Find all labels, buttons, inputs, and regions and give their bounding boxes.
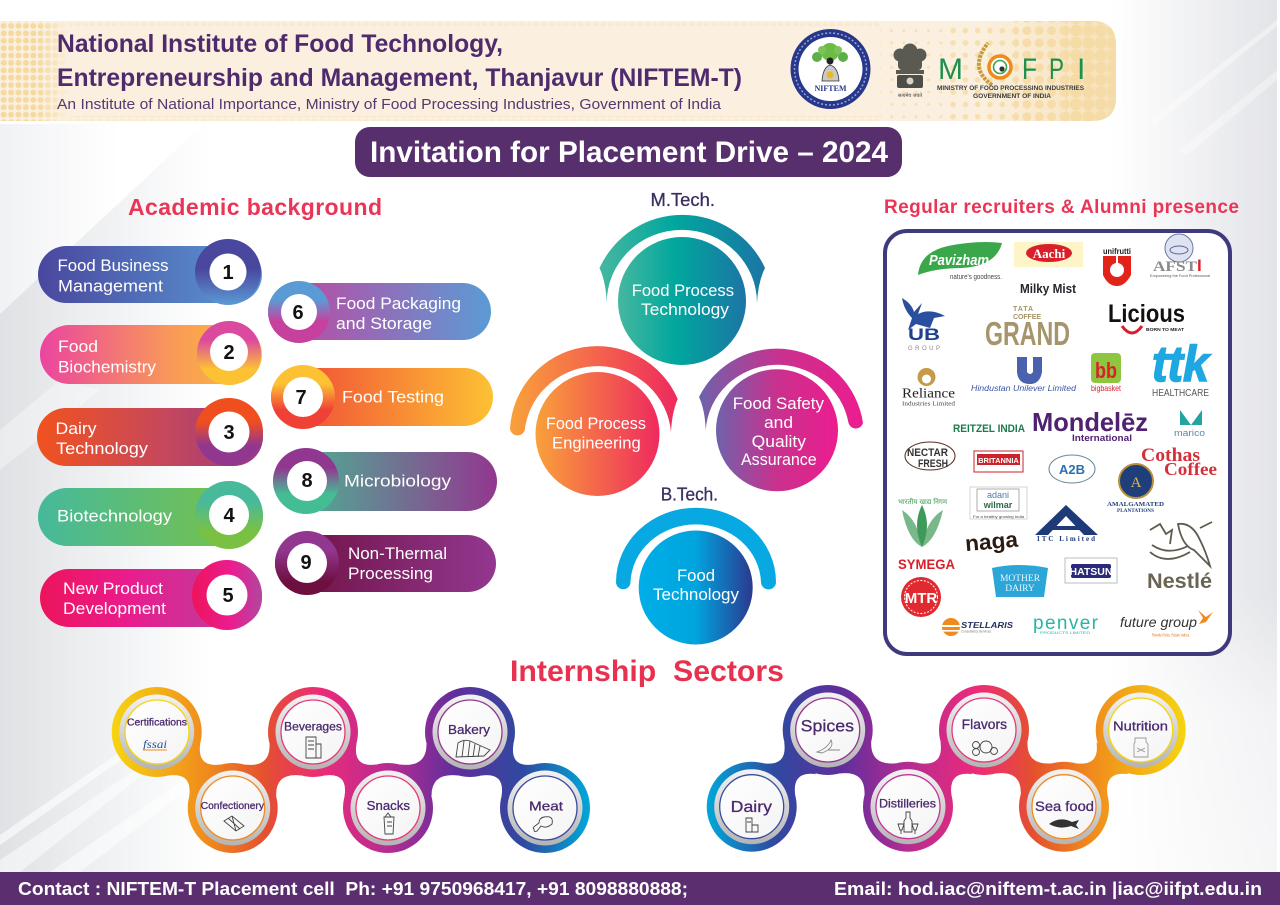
logo: Cothas Coffee: Cothas xyxy=(1141,445,1200,466)
logo: Food Corporation of India xyxy=(898,497,948,547)
panel: degree programmes xyxy=(510,190,863,644)
logo: unifrutti: unifrutti xyxy=(1103,247,1131,256)
heading: regular recruiters: Regular recruiters & Alumni presence xyxy=(884,197,1239,218)
item 6 xyxy=(268,281,491,343)
item 7 xyxy=(271,365,493,429)
chain: internship sectors left xyxy=(112,687,590,853)
sector: Flavors xyxy=(946,692,1022,768)
logo: A2B xyxy=(1049,455,1095,483)
logo: Hatsun xyxy=(1065,558,1117,583)
logo: Nectar Fresh: FRESH xyxy=(918,458,948,470)
logo: Britannia: BRITANNIA xyxy=(978,456,1019,465)
sector: Snacks: Snacks xyxy=(367,798,410,813)
sector: Flavors: Flavors xyxy=(962,717,1007,732)
sector: Confectionery: Confectionery xyxy=(201,800,265,812)
logo: Future Group xyxy=(1120,610,1213,638)
item 6: 6 xyxy=(292,302,304,324)
item 7: 7 xyxy=(295,387,307,409)
chain: internship sectors right xyxy=(707,685,1186,852)
item 1 xyxy=(38,239,262,305)
item 9: Processing xyxy=(348,564,433,583)
logo: bigbasket xyxy=(1091,353,1122,393)
header title text: Entrepreneurship and Management, Thanjavur (NIFTEM-T) xyxy=(57,64,742,92)
label: B.Tech: B.Tech. xyxy=(661,485,718,505)
header title text: An Institute of National Importance, Ministry of Food Processing Industries, Government of India xyxy=(57,96,722,113)
logo: Symega: SYMEGA xyxy=(898,556,955,572)
item 5: New Product xyxy=(63,579,163,598)
footer contact bar: Contact : NIFTEM-T Placement cell Ph: +91 9750968417, +91 8098880888; xyxy=(18,879,688,899)
logo: Nestle xyxy=(1147,522,1212,593)
logo: Adani Wilmar xyxy=(970,487,1027,519)
logo: TTK Healthcare: ttk xyxy=(1152,336,1211,392)
item 1: Management xyxy=(58,276,163,296)
logo: Tata Coffee Grand xyxy=(985,306,1070,352)
logo: Nestle: Nestlé xyxy=(1147,570,1212,593)
item 5: 5 xyxy=(222,585,234,607)
sector: Nutrition: Nutrition xyxy=(1113,718,1168,734)
logo: Cothas Coffee xyxy=(1141,445,1217,479)
logo: Stellaris: STELLARIS xyxy=(961,621,1014,630)
header title text xyxy=(57,30,742,113)
heading: internship sectors: Internship Sectors xyxy=(510,655,784,688)
Food Safety and Quality Assurance: and xyxy=(764,413,793,432)
item 8 xyxy=(273,448,497,514)
logo: Amalgamated Plantations xyxy=(1107,464,1164,514)
logo: Future Group: future group xyxy=(1120,614,1197,630)
logo: Pavizham: Pavizham xyxy=(929,252,989,269)
item 4: 4 xyxy=(223,505,235,527)
sector: Sea food: Sea food xyxy=(1035,798,1094,814)
logo: TTK Healthcare: HEALTHCARE xyxy=(1152,388,1209,399)
logo: Marico xyxy=(1174,410,1205,438)
logo: Tata Coffee Grand: GRAND xyxy=(985,315,1070,352)
item 6: and Storage xyxy=(336,314,432,333)
logo: MTR: MTR xyxy=(905,590,937,607)
logo: Aachi: Aachi xyxy=(1033,246,1066,261)
Food Safety and Quality Assurance: Food Safety xyxy=(733,394,824,413)
MoFPI logo: F xyxy=(1022,53,1037,86)
item 9: 9 xyxy=(300,552,312,574)
header title text: National Institute of Food Technology, xyxy=(57,30,503,58)
sector: Meat: Meat xyxy=(529,798,563,814)
logo: Reliance: Industries Limited xyxy=(902,402,955,408)
Food Safety and Quality Assurance xyxy=(699,349,863,491)
logo: Penver: penver xyxy=(1033,613,1099,634)
logo: Pavizham: nature's goodness. xyxy=(950,272,1002,281)
logo: ITC: ITC Limited xyxy=(1037,535,1095,543)
logo: bigbasket: bigbasket xyxy=(1091,384,1122,393)
MoFPI logo: MINISTRY OF FOOD PROCESSING INDUSTRIES xyxy=(937,85,1085,92)
Food Process Technology xyxy=(600,215,765,365)
item 2: Food xyxy=(58,337,98,356)
logo: Licious: Licious xyxy=(1108,300,1185,328)
Food Safety and Quality Assurance: Assurance xyxy=(741,450,817,469)
item 5 xyxy=(40,560,262,630)
logo: Mother Dairy: DAIRY xyxy=(1005,584,1035,594)
logo: Food Corporation of India: भारतीय खाद्य निगम xyxy=(898,497,948,506)
item 5: Development xyxy=(63,599,166,618)
logo: unifrutti xyxy=(1103,247,1131,286)
logo: Reliance xyxy=(902,368,955,408)
logo: Future Group: Rewrite Rules. Retain Values. xyxy=(1152,632,1190,638)
Food Technology xyxy=(616,508,776,644)
footer contact bar: Email: hod.iac@niftem-t.ac.in |iac@iifpt.edu.in xyxy=(834,879,1262,899)
sector: Certifications: Certifications xyxy=(127,716,187,728)
logo: Hatsun: HATSUN xyxy=(1070,566,1112,578)
logo: AFSTI xyxy=(1150,234,1210,278)
logo: Cothas Coffee: Coffee xyxy=(1164,459,1217,479)
logo: Reliance: Reliance xyxy=(902,386,955,402)
logo: Amalgamated Plantations: PLANTATIONS xyxy=(1117,509,1154,514)
item 2: Biochemistry xyxy=(58,358,156,376)
logo: Adani Wilmar: For a healthy growing India xyxy=(973,515,1024,519)
logo: Penver: PRODUCTS LIMITED xyxy=(1040,630,1090,635)
logo: UB Group: GROUP xyxy=(908,346,940,352)
footer contact bar xyxy=(0,872,1280,905)
logo: UB Group: UB xyxy=(908,325,940,344)
item 9 xyxy=(275,531,496,595)
title banner xyxy=(355,127,902,177)
sector: Confectionery xyxy=(195,770,270,846)
Food Technology: Food xyxy=(677,566,715,585)
logo: bigbasket: bb xyxy=(1095,358,1117,383)
item 9: Non-Thermal xyxy=(348,544,447,563)
MoFPI logo: GOVERNMENT OF INDIA xyxy=(973,93,1051,100)
logo: UB Group xyxy=(902,298,945,352)
logo: Naga: naga xyxy=(964,527,1020,556)
Food Safety and Quality Assurance: Quality xyxy=(752,432,806,451)
logo: Stellaris: Consultancy Services xyxy=(961,630,991,634)
panel: recruiter logos xyxy=(885,231,1230,654)
logo: Hindustan Unilever xyxy=(971,357,1076,393)
sector: Spices xyxy=(790,692,865,768)
NIFTEM logo xyxy=(790,29,870,109)
sector: Dairy xyxy=(714,769,789,844)
logo: Aachi xyxy=(1014,242,1083,267)
Food Process Engineering: Food Process xyxy=(546,414,646,433)
logo: Pavizham xyxy=(918,242,1002,281)
logo: MTR xyxy=(901,577,941,617)
item 3: 3 xyxy=(223,422,235,444)
logo: Amalgamated Plantations: A xyxy=(1131,475,1142,491)
logo: Mother Dairy: MOTHER xyxy=(1000,574,1041,584)
Food Process Technology: Food Process xyxy=(632,281,734,300)
logo: Adani Wilmar: adani xyxy=(987,490,1009,500)
logo: Licious: BORN TO MEAT xyxy=(1146,327,1184,332)
item 2: 2 xyxy=(223,342,235,364)
sector: Sea food xyxy=(1026,769,1102,844)
NIFTEM logo: NIFTEM xyxy=(814,84,847,93)
sector: Snacks xyxy=(350,770,426,846)
Food Process Engineering xyxy=(510,346,678,496)
sector: Certifications: fssai xyxy=(143,737,167,751)
item 8: Microbiology xyxy=(344,472,452,490)
heading: academic background: Academic background xyxy=(128,194,382,220)
logo: Mondelez: International xyxy=(1072,433,1132,444)
item 8: 8 xyxy=(301,470,313,492)
logo: Reitzel India: REITZEL INDIA xyxy=(953,423,1025,435)
Food Process Engineering: Engineering xyxy=(552,434,641,453)
sector: Bakery: Bakery xyxy=(448,722,491,737)
logo: Hindustan Unilever: Hindustan Unilever Limited xyxy=(971,383,1076,393)
logo: AFSTI: AFST xyxy=(1153,259,1197,275)
Food Process Technology: Technology xyxy=(641,300,730,319)
logo: AFSTI: I xyxy=(1197,256,1202,275)
logo: AFSTI: Empowering the Food Professional xyxy=(1150,273,1210,278)
sector: Spices: Spices xyxy=(801,716,854,736)
MoFPI logo: I xyxy=(1077,53,1085,86)
national emblem xyxy=(894,44,926,99)
MoFPI logo: P xyxy=(1049,53,1064,86)
MoFPI logo: M xyxy=(938,53,963,86)
logo: Tata Coffee Grand: TATA xyxy=(1013,306,1033,313)
item 1: Food Business xyxy=(58,256,168,275)
logo: Marico: marico xyxy=(1174,428,1205,438)
sector: Certifications xyxy=(119,694,194,770)
logo: Adani Wilmar: wilmar xyxy=(983,500,1013,510)
logo: Britannia xyxy=(974,451,1023,472)
sector: Beverages: Beverages xyxy=(284,720,342,734)
logo: Stellaris xyxy=(942,618,1014,636)
panel: academic background list xyxy=(37,239,497,630)
logo: Nectar Fresh: NECTAR xyxy=(907,447,948,459)
sector: Meat xyxy=(508,770,582,846)
logo: Nectar Fresh xyxy=(905,442,955,470)
item 4: Biotechnology xyxy=(57,506,173,526)
item 7: Food Testing xyxy=(342,388,444,406)
title banner: Invitation for Placement Drive – 2024 xyxy=(370,136,888,169)
MoFPI logo xyxy=(937,43,1085,100)
label: M.Tech: M.Tech. xyxy=(650,190,715,210)
logo: ITC xyxy=(1035,505,1098,543)
logo: Mondelez: Mondelēz xyxy=(1032,407,1148,437)
Food Technology: Technology xyxy=(653,585,739,604)
item 6: Food Packaging xyxy=(336,294,461,313)
sector: Dairy: Dairy xyxy=(731,799,772,816)
logo: Tata Coffee Grand: COFFEE xyxy=(1013,314,1041,321)
sector: Nutrition xyxy=(1103,692,1178,768)
logo: Mother Dairy xyxy=(992,565,1048,597)
item 3: Dairy xyxy=(56,419,97,438)
logo: A2B: A2B xyxy=(1059,462,1085,477)
item 4 xyxy=(38,481,263,549)
item 3: Technology xyxy=(56,439,149,458)
sector: Distilleries xyxy=(870,769,946,844)
sector: Bakery xyxy=(432,694,508,770)
sector: Beverages xyxy=(276,694,350,770)
logo: Milky Mist: Milky Mist xyxy=(1020,281,1077,296)
national emblem: सत्यमेव जयते xyxy=(898,92,922,99)
item 1: 1 xyxy=(222,262,234,284)
logo: Amalgamated Plantations: AMALGAMATED xyxy=(1107,501,1164,508)
header band xyxy=(0,18,1122,124)
sector: Distilleries: Distilleries xyxy=(879,796,936,810)
item 3 xyxy=(37,398,263,466)
item 2 xyxy=(40,321,262,385)
